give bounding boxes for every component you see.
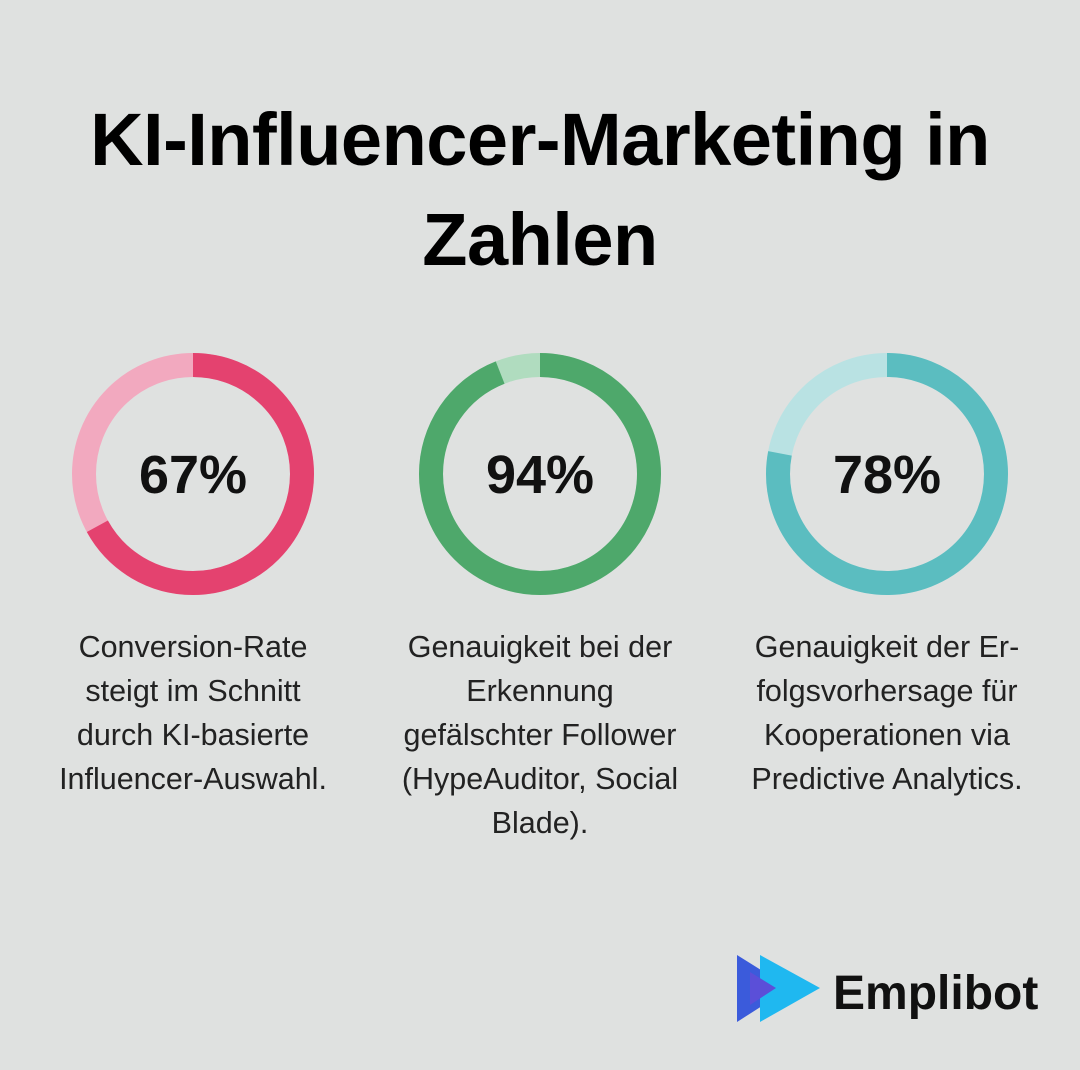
caption 1 [59,630,327,796]
caption 3: folgsvorhersage für [756,674,1018,708]
caption 2 [402,630,678,840]
logo text: Emplibot [833,967,1038,1020]
caption 2: Erkennung [466,674,614,708]
title: KI-Influencer-Marketing in [90,98,990,181]
caption 3: Genauigkeit der Er- [755,630,1019,664]
caption 3 [751,630,1023,796]
caption 1: steigt im Schnitt [85,674,301,708]
caption 3: Kooperationen via [764,718,1010,752]
donut: 78%: 78% [833,445,941,505]
title: Zahlen [422,198,658,281]
title [90,98,990,281]
donut: 94% [431,365,649,583]
caption 2: Blade). [492,806,588,840]
caption 3: Predictive Analytics. [751,762,1023,796]
caption 2: gefälschter Follower [404,718,676,752]
caption 1: Influencer-Auswahl. [59,762,327,796]
donut: 67%: 67% [139,445,247,505]
donut: 67% [84,365,302,583]
caption 1: Conversion-Rate [79,630,307,664]
caption 1: durch KI-basierte [77,718,309,752]
caption 2: Genauigkeit bei der [408,630,672,664]
logo icon [737,955,820,1022]
caption 2: (HypeAuditor, Social [402,762,678,796]
donut: 94%: 94% [486,445,594,505]
donut: 78% [778,365,996,583]
